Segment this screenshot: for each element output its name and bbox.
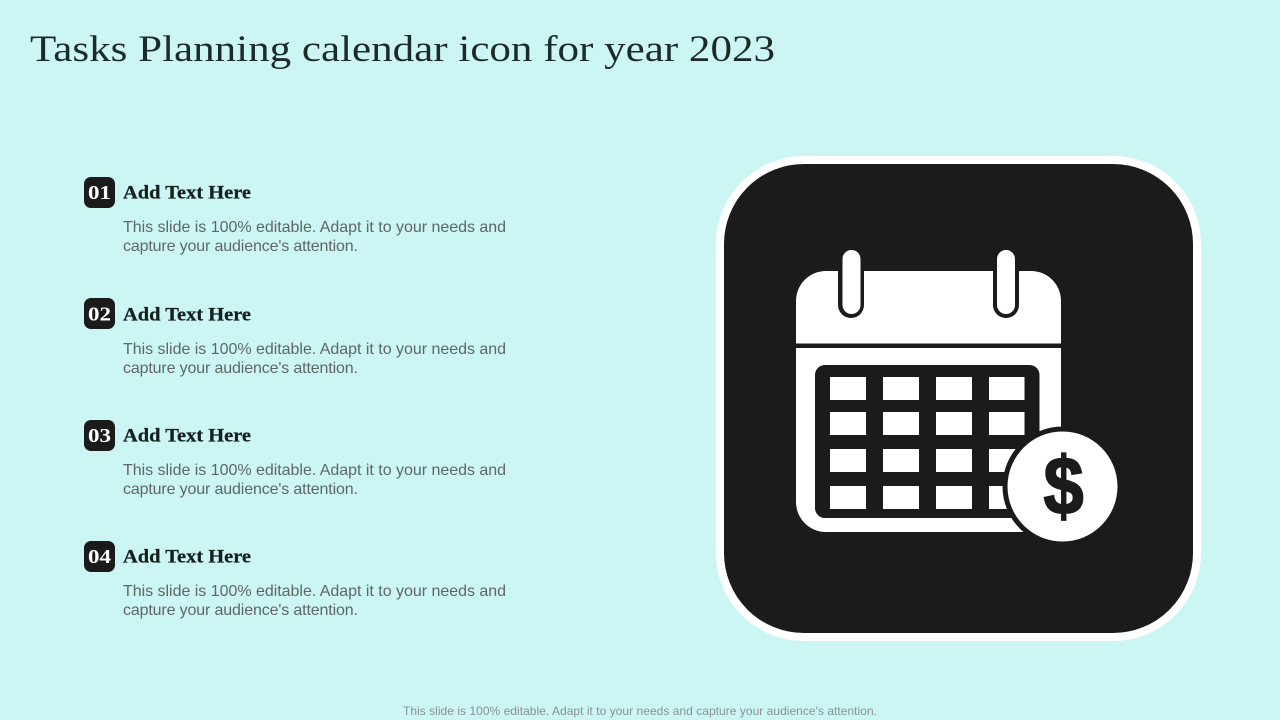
heading 04: Add Text Here	[123, 546, 251, 568]
calendar ring right	[993, 250, 1019, 318]
body text 03: capture your audience's attention.	[123, 481, 358, 498]
list item 01	[84, 177, 506, 255]
icon: dollar coin	[1002, 426, 1122, 546]
heading 01: Add Text Here	[123, 182, 251, 204]
number badge 02	[84, 298, 115, 329]
body text 02: This slide is 100% editable. Adapt it to your needs and	[123, 341, 506, 358]
number badge 02: 02	[88, 304, 111, 326]
number badge 01: 01	[88, 182, 111, 204]
body text 03: This slide is 100% editable. Adapt it to your needs and	[123, 462, 506, 479]
number badge 04: 04	[88, 546, 111, 568]
title: Tasks Planning calendar icon for year 2023	[30, 29, 775, 70]
body text 02	[123, 341, 506, 377]
rounded dark tile with white border	[720, 160, 1197, 637]
list item 02	[84, 298, 506, 377]
body text 04	[123, 583, 506, 619]
calendar ring left	[838, 250, 864, 318]
body text 02: capture your audience's attention.	[123, 360, 358, 377]
icon: calendar	[796, 250, 1061, 532]
body text 01: This slide is 100% editable. Adapt it to your needs and	[123, 219, 506, 236]
icon: dollar coin: $	[1043, 441, 1084, 532]
list item 03	[84, 420, 506, 498]
number badge 03: 03	[88, 425, 111, 447]
footer note: This slide is 100% editable. Adapt it to your needs and capture your audience's attention.	[403, 704, 877, 718]
body text 04: capture your audience's attention.	[123, 602, 358, 619]
list item 04	[84, 541, 506, 619]
body text 01: capture your audience's attention.	[123, 238, 358, 255]
body text 01	[123, 219, 506, 255]
icon panel: calendar with dollar coin	[720, 160, 1197, 637]
number badge 04	[84, 541, 115, 572]
body text 03	[123, 462, 506, 498]
number badge 01	[84, 177, 115, 208]
heading 03: Add Text Here	[123, 426, 251, 446]
number badge 03	[84, 420, 115, 451]
body text 04: This slide is 100% editable. Adapt it to your needs and	[123, 583, 506, 600]
heading 02: Add Text Here	[123, 304, 251, 326]
